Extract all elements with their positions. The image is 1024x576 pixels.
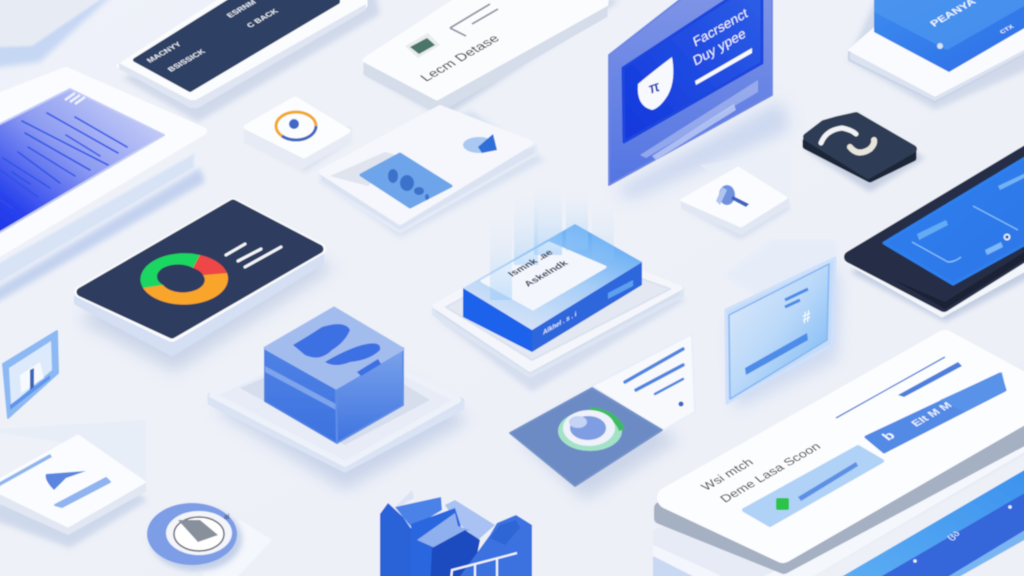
ring lettering: al — [224, 514, 230, 521]
cube right face — [336, 348, 403, 443]
light-blue pill — [744, 447, 882, 525]
panel: top-right blue card — [848, 0, 1024, 110]
panel: blurred top-left card — [0, 0, 130, 70]
cube top face — [265, 308, 403, 388]
text: dark card labels: BSISSICK — [166, 48, 208, 73]
card top — [668, 341, 1024, 552]
note triangle — [592, 334, 695, 431]
panel: central server box with light beams — [434, 185, 686, 392]
panel: light-blue glass screen: # — [802, 307, 812, 328]
panel: large chart card left — [0, 71, 205, 312]
icon: shield — [638, 57, 673, 110]
text: card heading: Wsi mtch — [698, 456, 756, 493]
block one — [380, 503, 412, 576]
icon tile: paint roller — [682, 150, 792, 240]
panel: dark donut chart card — [78, 204, 335, 372]
text: top-right card: CTX — [999, 24, 1016, 35]
card lines — [450, 4, 498, 36]
panel: light-blue glass screen — [722, 240, 840, 410]
light beams — [490, 185, 614, 300]
cube glyph — [293, 324, 381, 376]
blue band — [819, 461, 1024, 576]
text: button label: EIt M M — [909, 401, 955, 429]
white underline — [695, 48, 752, 85]
thumbnail — [405, 33, 440, 58]
donut chart — [140, 253, 228, 305]
panel: lens plate and note — [510, 334, 695, 500]
phone screen details — [912, 171, 1024, 262]
small glyphs on band — [913, 505, 1012, 563]
panel: bottom-right stacked card — [653, 341, 1024, 576]
text: top-right card — [928, 0, 1016, 35]
panel: middle card with blue chart — [320, 108, 545, 238]
pale top — [445, 500, 495, 540]
icon: heart — [463, 134, 497, 153]
lens — [558, 411, 622, 451]
icon tile: white chevron tile — [0, 420, 148, 548]
text: dark card labels — [145, 0, 280, 73]
text: box labels: Ismnk .ae — [506, 248, 556, 279]
panel: dark label card top — [118, 0, 380, 122]
icon: dark cloud tile — [805, 116, 925, 192]
green status square — [776, 498, 789, 510]
white window frame — [450, 553, 517, 576]
chart lines — [0, 113, 127, 208]
block three — [450, 515, 532, 576]
cube left face — [265, 348, 337, 443]
panel: Locm Detase card — [365, 0, 620, 118]
panel: blue cube on platform — [210, 308, 470, 490]
thin rule — [836, 357, 945, 418]
block two — [411, 508, 462, 576]
icon tile: T upload — [3, 331, 58, 418]
panel: shield card — [609, 0, 790, 200]
text: box labels: Askelndk — [522, 259, 571, 289]
panel: dark phone right — [846, 143, 1024, 322]
card edge — [660, 411, 1024, 568]
icon: lens ring — [147, 503, 272, 576]
blue button — [866, 372, 1006, 452]
blue button: b — [879, 429, 899, 443]
text: shield card title — [691, 5, 750, 69]
text: shield card title: Duy ypee — [691, 25, 747, 69]
icon: shield: π — [648, 78, 661, 98]
text: card title: Lecm Detase — [417, 32, 503, 84]
lower layers — [653, 411, 1024, 576]
box side faces — [463, 288, 532, 352]
panel: bottom blue blocks — [380, 490, 532, 576]
text: dark card labels: C BACK — [245, 7, 280, 29]
light strips — [640, 80, 758, 160]
text: shield card title: Facrsenct — [691, 5, 750, 50]
box top face — [463, 224, 642, 330]
text: dark card labels: MACNYY — [145, 40, 184, 64]
legend lines — [226, 244, 281, 267]
text: box labels — [506, 248, 571, 289]
text: card heading: Deme Lasa Scoon — [717, 440, 824, 505]
small glyphs on band: ცა — [945, 529, 962, 542]
chart blobs — [388, 169, 429, 200]
icon tile: orange ring — [246, 99, 352, 172]
chart tick marks — [65, 93, 85, 104]
plate — [510, 388, 662, 486]
text: box side: Alkhel . s . i — [543, 311, 576, 337]
